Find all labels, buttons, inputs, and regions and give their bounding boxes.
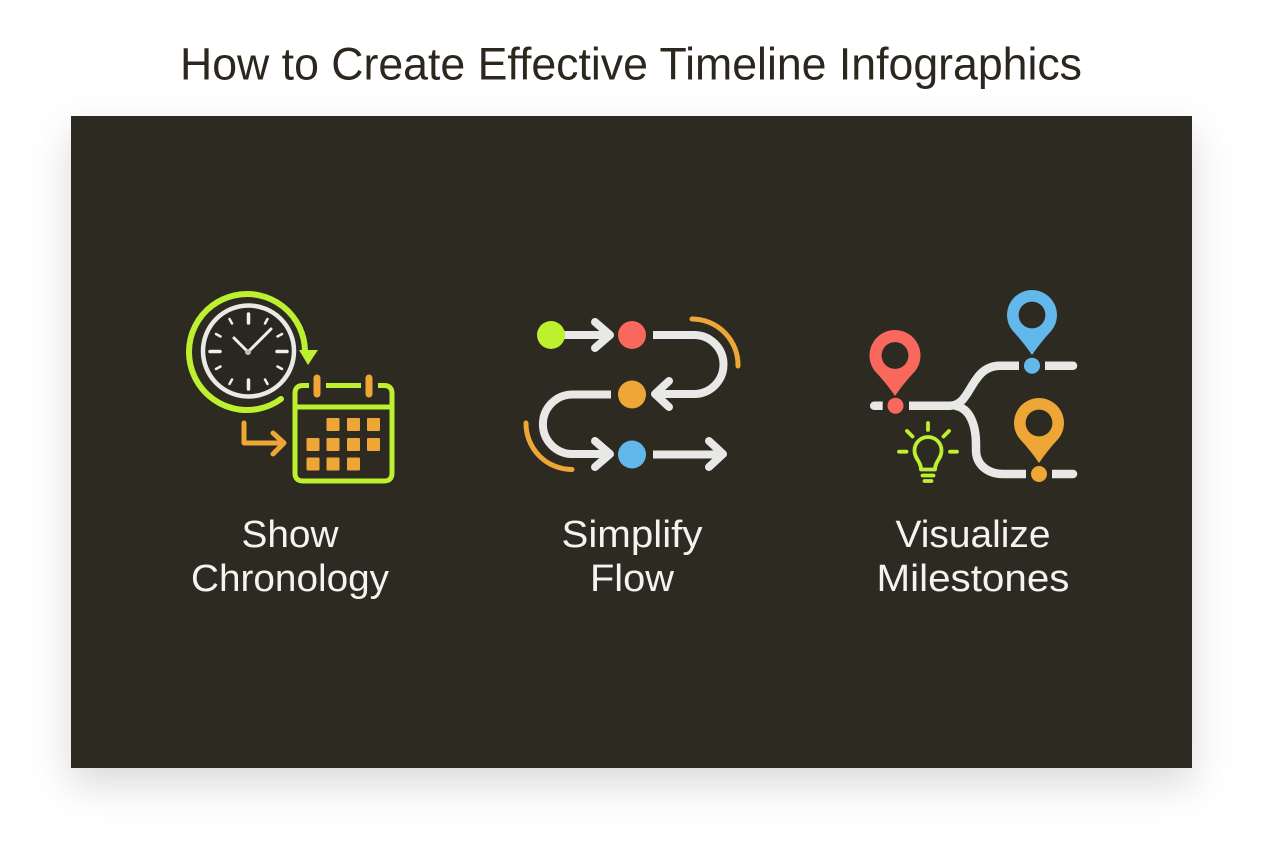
flow paths bbox=[543, 322, 724, 467]
label: visualize milestones: Visualize bbox=[896, 514, 1050, 556]
icon: branching milestones bbox=[870, 290, 1077, 482]
icon: clock and calendar bbox=[189, 294, 392, 481]
icon: orange arrow bbox=[244, 423, 284, 454]
branching lines bbox=[909, 366, 1026, 474]
column: simplify flow bbox=[526, 319, 738, 600]
icon: calendar bbox=[295, 378, 392, 481]
panel: dark background bbox=[71, 116, 1192, 768]
node dots bbox=[537, 321, 646, 468]
label: simplify flow: Flow bbox=[590, 558, 675, 600]
line stubs bbox=[870, 362, 1077, 478]
column: show chronology bbox=[189, 294, 392, 600]
icon: winding flow bbox=[526, 319, 738, 470]
icon: green cycle arrow bbox=[189, 294, 318, 410]
pin: orange bbox=[1014, 398, 1064, 482]
icon: clock bbox=[203, 306, 294, 396]
icon: light bulb bbox=[899, 423, 957, 481]
label: visualize milestones: Milestones bbox=[876, 558, 1070, 600]
pin: red bbox=[870, 330, 920, 414]
title: How to Create Effective Timeline Infographics bbox=[180, 38, 1082, 90]
label: show chronology: Chronology bbox=[191, 558, 389, 600]
label: show chronology: Show bbox=[242, 514, 339, 556]
pin: blue bbox=[1007, 290, 1057, 374]
label: simplify flow: Simplify bbox=[562, 514, 702, 556]
column: visualize milestones bbox=[870, 290, 1077, 600]
orange accent arcs bbox=[526, 319, 738, 470]
